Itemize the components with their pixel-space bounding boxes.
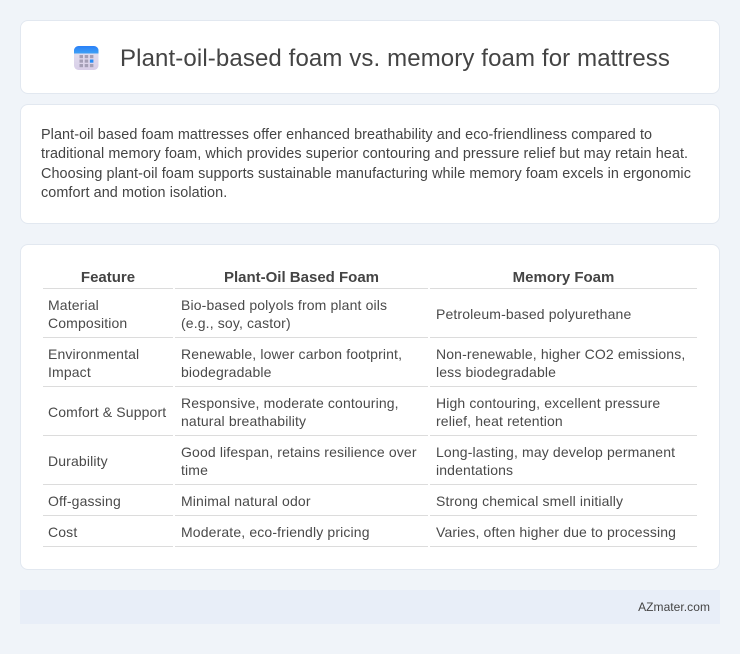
row: off-gassing: Off-gassing: [48, 493, 121, 509]
table: feature comparison: [43, 269, 697, 547]
row: off-gassing: [48, 493, 623, 509]
icon: calendar: [74, 46, 98, 70]
row: durability: Durability: [48, 453, 108, 469]
row: material composition: [48, 297, 631, 331]
row: environmental impact: Impact: [48, 364, 91, 380]
panel: comparison table: [20, 244, 720, 570]
summary text: Choosing plant-oil foam supports sustainable manufacturing while memory foam excels in ergonomic: [41, 166, 691, 182]
row: comfort and support: High contouring, excellent pressure: [436, 395, 660, 411]
row: cost: Cost: [48, 524, 77, 540]
row: off-gassing: Strong chemical smell initially: [436, 493, 623, 509]
row: environmental impact: Non-renewable, higher CO2 emissions,: [436, 346, 685, 362]
row: comfort and support: Comfort & Support: [48, 404, 166, 420]
row: durability: Long-lasting, may develop permanent: [436, 444, 675, 460]
row: environmental impact: less biodegradable: [436, 364, 556, 380]
footer credit: AZmater.com: [638, 600, 710, 614]
row: comfort and support: relief, heat retention: [436, 413, 563, 429]
title: Plant-oil-based foam vs. memory foam for mattress: [120, 45, 670, 72]
row: comfort and support: natural breathability: [181, 413, 306, 429]
row: durability: Good lifespan, retains resilience over: [181, 444, 417, 460]
panel: title card: [20, 20, 720, 94]
row: cost: [48, 524, 676, 540]
row: environmental impact: Renewable, lower carbon footprint,: [181, 346, 402, 362]
row: environmental impact: Environmental: [48, 346, 139, 362]
table header: Plant-Oil Based Foam: [224, 269, 379, 286]
row: material composition: (e.g., soy, castor): [181, 315, 291, 331]
summary text: Plant-oil based foam mattresses offer enhanced breathability and eco-friendliness compared to: [41, 127, 652, 143]
table header: Memory Foam: [513, 269, 614, 286]
row: cost: Moderate, eco-friendly pricing: [181, 524, 370, 540]
footer bar: [20, 590, 720, 624]
summary text: [41, 127, 691, 201]
panel: summary: [20, 104, 720, 224]
row: environmental impact: [48, 346, 685, 380]
row: environmental impact: biodegradable: [181, 364, 272, 380]
row: off-gassing: Minimal natural odor: [181, 493, 311, 509]
row: durability: indentations: [436, 462, 513, 478]
table header: Feature: [81, 269, 135, 286]
row: comfort and support: [48, 395, 660, 429]
row: durability: time: [181, 462, 208, 478]
table header: [81, 269, 614, 286]
summary text: traditional memory foam, which provides superior contouring and pressure relief but may retain heat.: [41, 146, 688, 162]
row: material composition: Bio-based polyols from plant oils: [181, 297, 387, 313]
row: comfort and support: Responsive, moderate contouring,: [181, 395, 399, 411]
row: durability: [48, 444, 675, 478]
row: cost: Varies, often higher due to processing: [436, 524, 676, 540]
summary text: comfort and motion isolation.: [41, 185, 227, 201]
row: material composition: Composition: [48, 315, 127, 331]
row: material composition: Material: [48, 297, 99, 313]
row: material composition: Petroleum-based polyurethane: [436, 306, 631, 322]
